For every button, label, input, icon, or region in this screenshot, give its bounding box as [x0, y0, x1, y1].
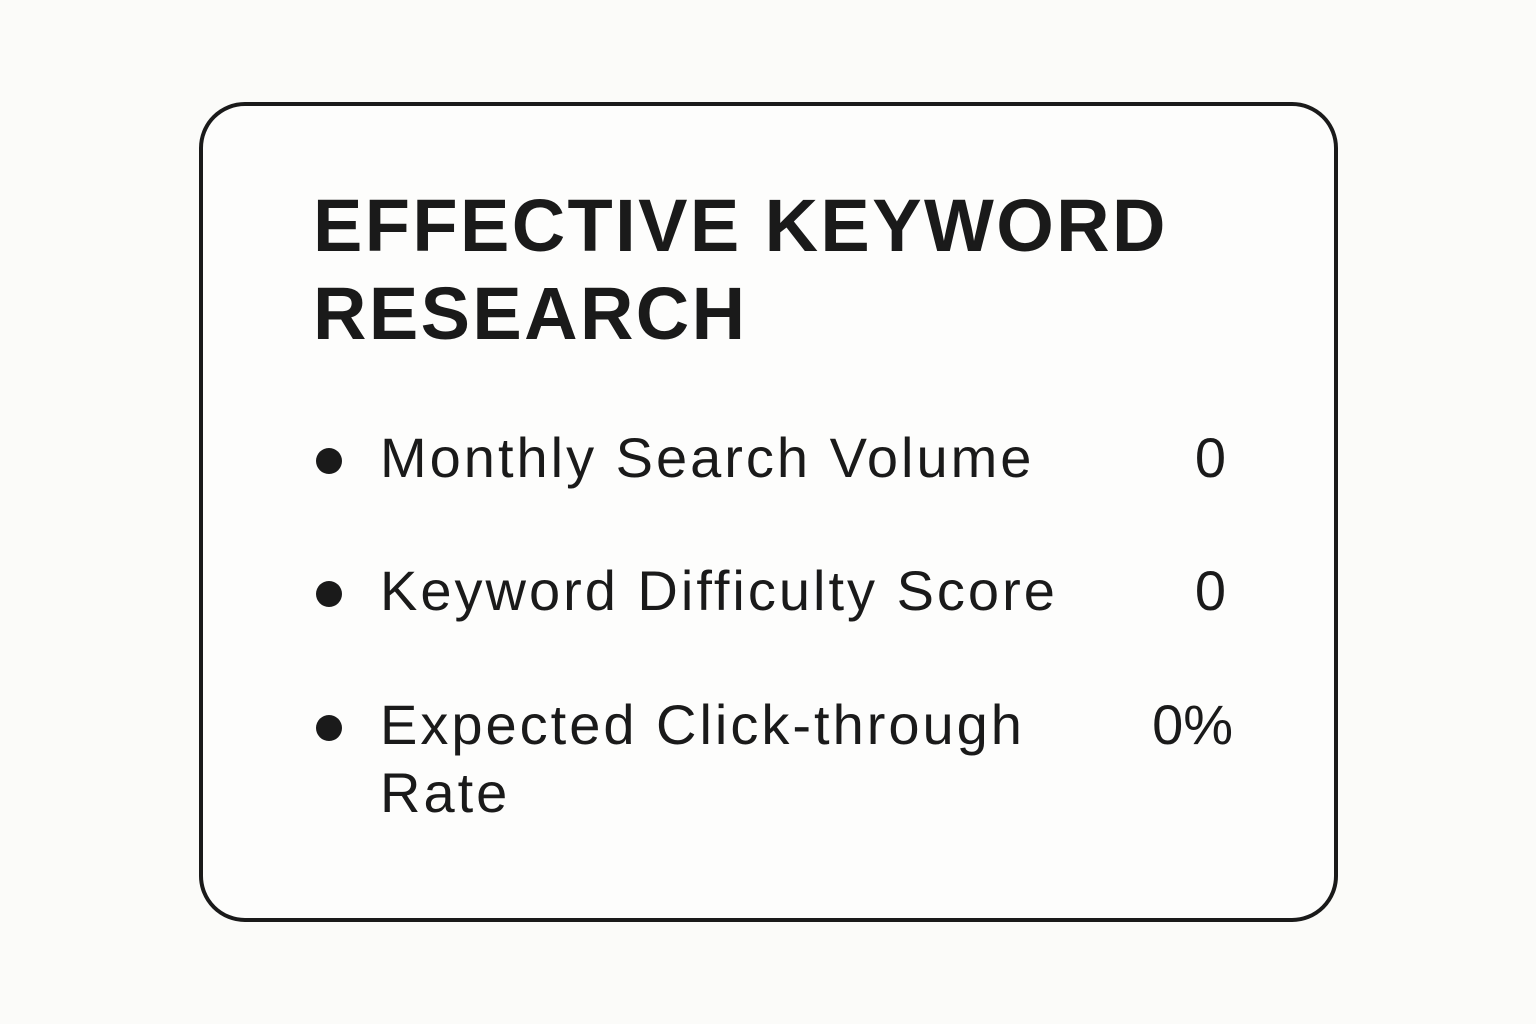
item: keyword difficulty: Keyword Difficulty Score — [380, 559, 1058, 622]
title: RESEARCH — [313, 272, 747, 355]
item: monthly search volume: Monthly Search Volume — [380, 426, 1034, 489]
title — [313, 184, 1168, 355]
item: keyword difficulty: 0 — [1195, 559, 1226, 622]
item: click-through rate: 0% — [1152, 693, 1233, 756]
item: click-through rate: Rate — [380, 761, 510, 824]
item: click-through rate: Expected Click-through — [380, 693, 1025, 756]
item: click-through rate — [316, 693, 1233, 824]
card panel — [199, 102, 1338, 922]
title: EFFECTIVE KEYWORD — [313, 184, 1168, 267]
item: monthly search volume: 0 — [1195, 426, 1226, 489]
